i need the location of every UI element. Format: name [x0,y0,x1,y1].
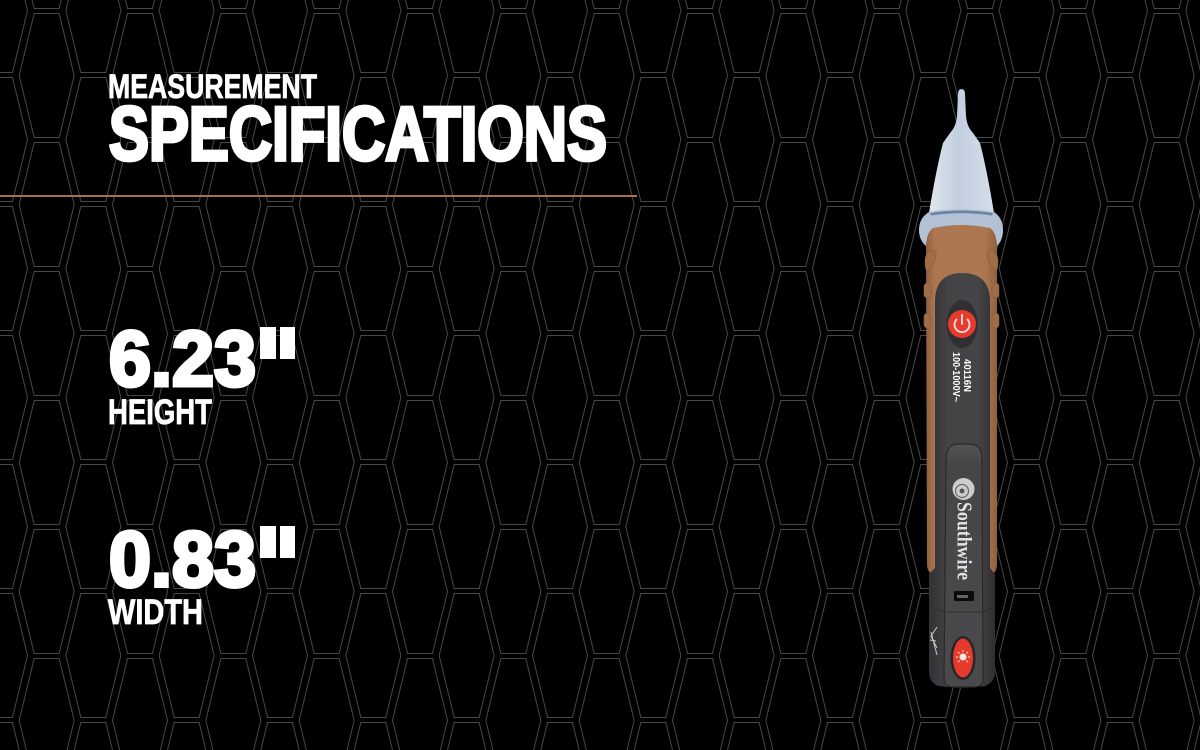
grip bumps left [924,250,936,328]
sliding clip panel [944,444,983,687]
flashlight recess [950,636,976,680]
width inch mark: " [258,504,298,627]
height label: HEIGHT [108,392,212,432]
power button recess [946,300,978,348]
emblem disc [952,478,974,500]
specification: width [108,504,298,632]
product: voltage tester pen [919,89,1003,687]
title line: measurement: MEASUREMENT [108,68,317,106]
model number text: 40116N [961,359,973,392]
title line: specifications: SPECIFICATIONS [109,92,607,177]
panel seam [929,606,995,612]
slot detail [957,595,968,598]
dark upper body [929,273,995,687]
flashlight icon [956,650,970,662]
power icon [954,315,970,332]
power button red face [948,310,976,338]
grip bumps right [987,250,999,328]
flashlight button [950,636,976,680]
height inch mark: " [258,305,298,428]
emblem rings [956,484,968,498]
title block [108,68,607,177]
safety category mark [930,627,937,655]
clear flange ring [919,209,1003,246]
height value: 6.23 [109,314,256,402]
ring shadow band [930,210,993,216]
clear probe tip and cone [929,89,994,213]
orange divider rule [0,195,637,197]
width value: 0.83 [109,515,256,603]
width label: WIDTH [108,592,203,632]
indicator slot [954,591,974,601]
voltage range text: 100-1000V~ [950,352,962,402]
brown grip body [926,225,997,574]
flashlight red face [953,638,973,678]
brand name: Southwire [952,502,976,580]
power button [946,300,978,348]
emblem centre [960,488,964,494]
logo emblem [952,478,974,500]
specification: height [108,305,298,432]
